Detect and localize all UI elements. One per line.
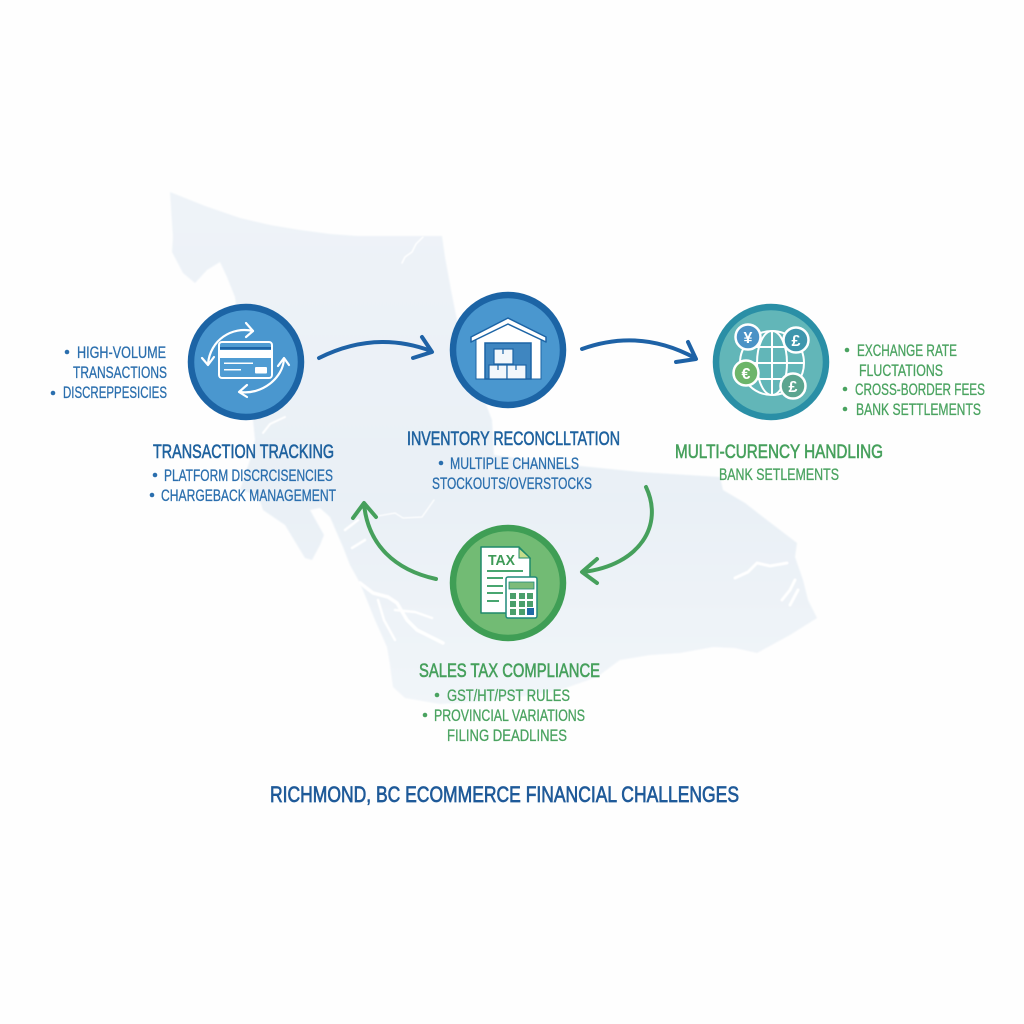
heading: multi-currency handling: MULTI-CURENCY HANDLING xyxy=(675,441,883,463)
icon: inventory warehouse xyxy=(453,295,563,405)
background map of British Columbia xyxy=(170,192,817,704)
text: transaction tracking bullets: CHARGEBACK MANAGEMENT xyxy=(161,487,336,505)
icon: tax document and calculator xyxy=(453,528,563,638)
icon: multi-currency globe and coins xyxy=(716,307,826,417)
text: top-left bullets: TRANSACTIONS xyxy=(73,364,167,382)
text: transaction tracking bullets: PLATFORM DISCRCISENCIES xyxy=(164,467,333,485)
icon: tax document and calculator: TAX xyxy=(488,552,515,569)
arrow: inventory to multi-currency xyxy=(582,340,696,362)
icon: multi-currency globe and coins: ¥ xyxy=(744,330,753,347)
arrow: inventory to sales tax xyxy=(582,487,652,583)
text: multi-currency side bullets: BANK SETTLEMENTS xyxy=(856,401,981,419)
icon: multi-currency globe and coins: £ xyxy=(789,379,798,396)
text: top-left bullets: HIGH-VOLUME xyxy=(77,344,166,362)
icon: multi-currency globe and coins: € xyxy=(742,366,751,383)
heading: sales tax compliance: SALES TAX COMPLIANCE xyxy=(419,660,600,682)
text: multi-currency side bullets xyxy=(843,342,985,419)
text: sales tax bullets: FILING DEADLINES xyxy=(447,727,567,745)
text: top-left bullets xyxy=(51,344,167,402)
text: inventory bullets: MULTIPLE CHANNELS xyxy=(450,455,579,473)
text: top-left bullets: DISCREPPESICIES xyxy=(63,384,167,402)
text: sales tax bullets: GST/HT/PST RULES xyxy=(447,687,570,705)
text: multi-currency side bullets: EXCHANGE RATE xyxy=(857,342,957,360)
arrow: transaction tracking to inventory xyxy=(319,337,432,358)
icon: multi-currency globe and coins: £ xyxy=(792,333,801,350)
text: multi-currency side bullets: FLUCTATIONS xyxy=(859,362,943,380)
icon: transaction tracking credit card xyxy=(191,307,301,417)
text: inventory bullets: STOCKOUTS/OVERSTOCKS xyxy=(432,475,592,493)
heading: inventory reconciliation: INVENTORY RECONCLLTATION xyxy=(407,428,620,450)
title: RICHMOND, BC ECOMMERCE FINANCIAL CHALLENGES xyxy=(270,782,739,807)
text: transaction tracking bullets xyxy=(150,467,336,505)
text: sales tax bullets: PROVINCIAL VARIATIONS xyxy=(434,707,585,725)
heading: transaction tracking: TRANSACTION TRACKING xyxy=(153,441,334,463)
text: sales tax bullets xyxy=(423,687,585,745)
text: inventory bullets xyxy=(432,455,592,493)
arrow: sales tax to transaction tracking xyxy=(353,503,436,579)
text: multi-currency sub line: BANK SETLEMENTS xyxy=(719,466,839,484)
